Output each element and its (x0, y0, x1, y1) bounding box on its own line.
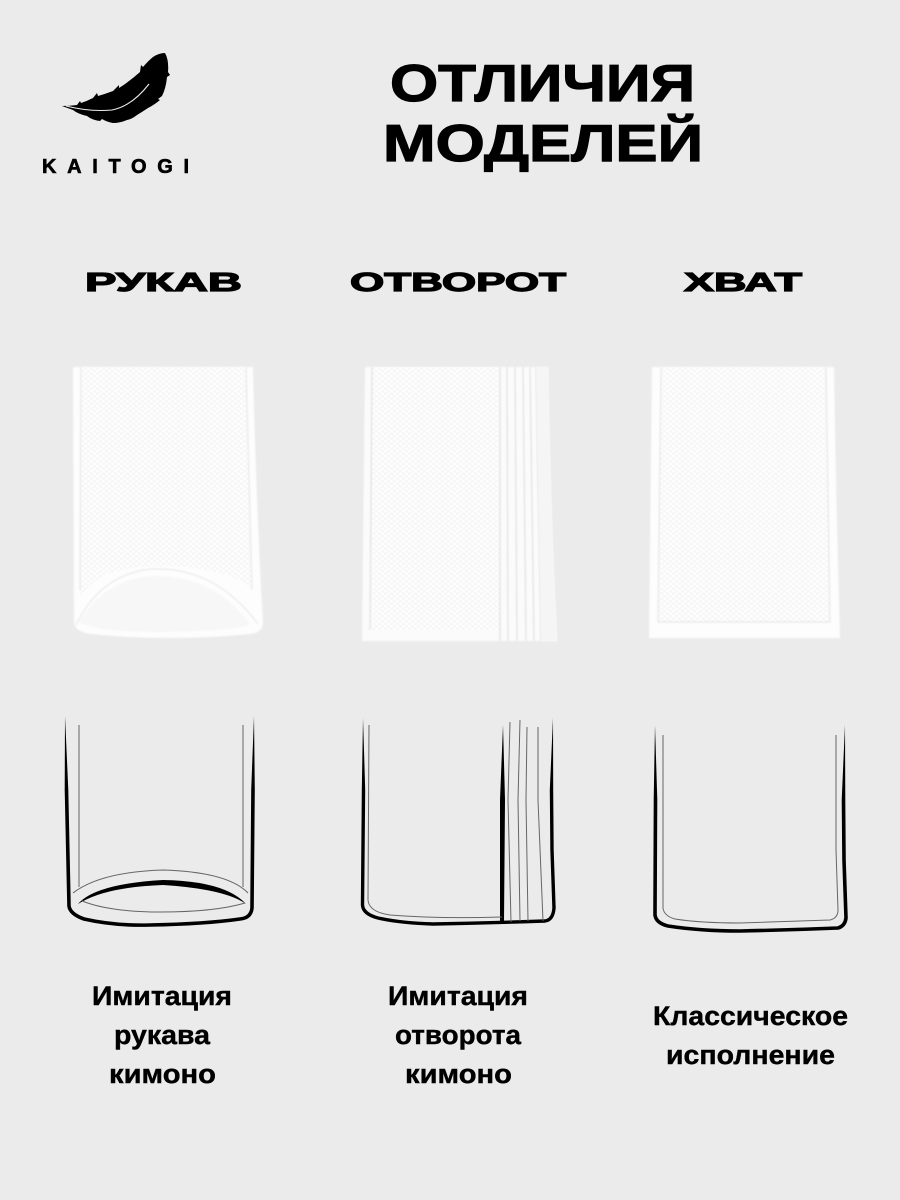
caption: grip: исполнение (666, 1040, 835, 1070)
caption: lapel: отворота (395, 1020, 522, 1050)
logo: Kaitogi feather (62, 53, 170, 123)
photo: lapel model (362, 367, 557, 641)
title (383, 55, 703, 173)
caption: sleeve: Имитация (92, 981, 232, 1011)
column heading: grip: ХВАТ (684, 267, 802, 297)
photo: kimono sleeve (73, 367, 263, 638)
line drawing: grip (654, 725, 846, 931)
line drawing: lapel (362, 718, 554, 924)
line drawing: sleeve (65, 716, 255, 925)
photo: classic grip model (649, 367, 840, 638)
caption: sleeve (92, 981, 232, 1089)
caption: lapel: кимоно (405, 1059, 512, 1089)
column heading: lapel: ОТВОРОТ (350, 267, 566, 297)
title: МОДЕЛЕЙ (383, 114, 703, 173)
caption: lapel (388, 981, 528, 1089)
logo wordmark: KAITOGI (42, 156, 189, 178)
caption: grip: Классическое (653, 1001, 848, 1031)
caption: sleeve: рукава (114, 1020, 211, 1050)
title: ОТЛИЧИЯ (390, 55, 695, 113)
caption: lapel: Имитация (388, 981, 528, 1011)
caption: grip (653, 1001, 848, 1070)
caption: sleeve: кимоно (109, 1059, 216, 1089)
column heading: sleeve: РУКАВ (85, 267, 242, 297)
